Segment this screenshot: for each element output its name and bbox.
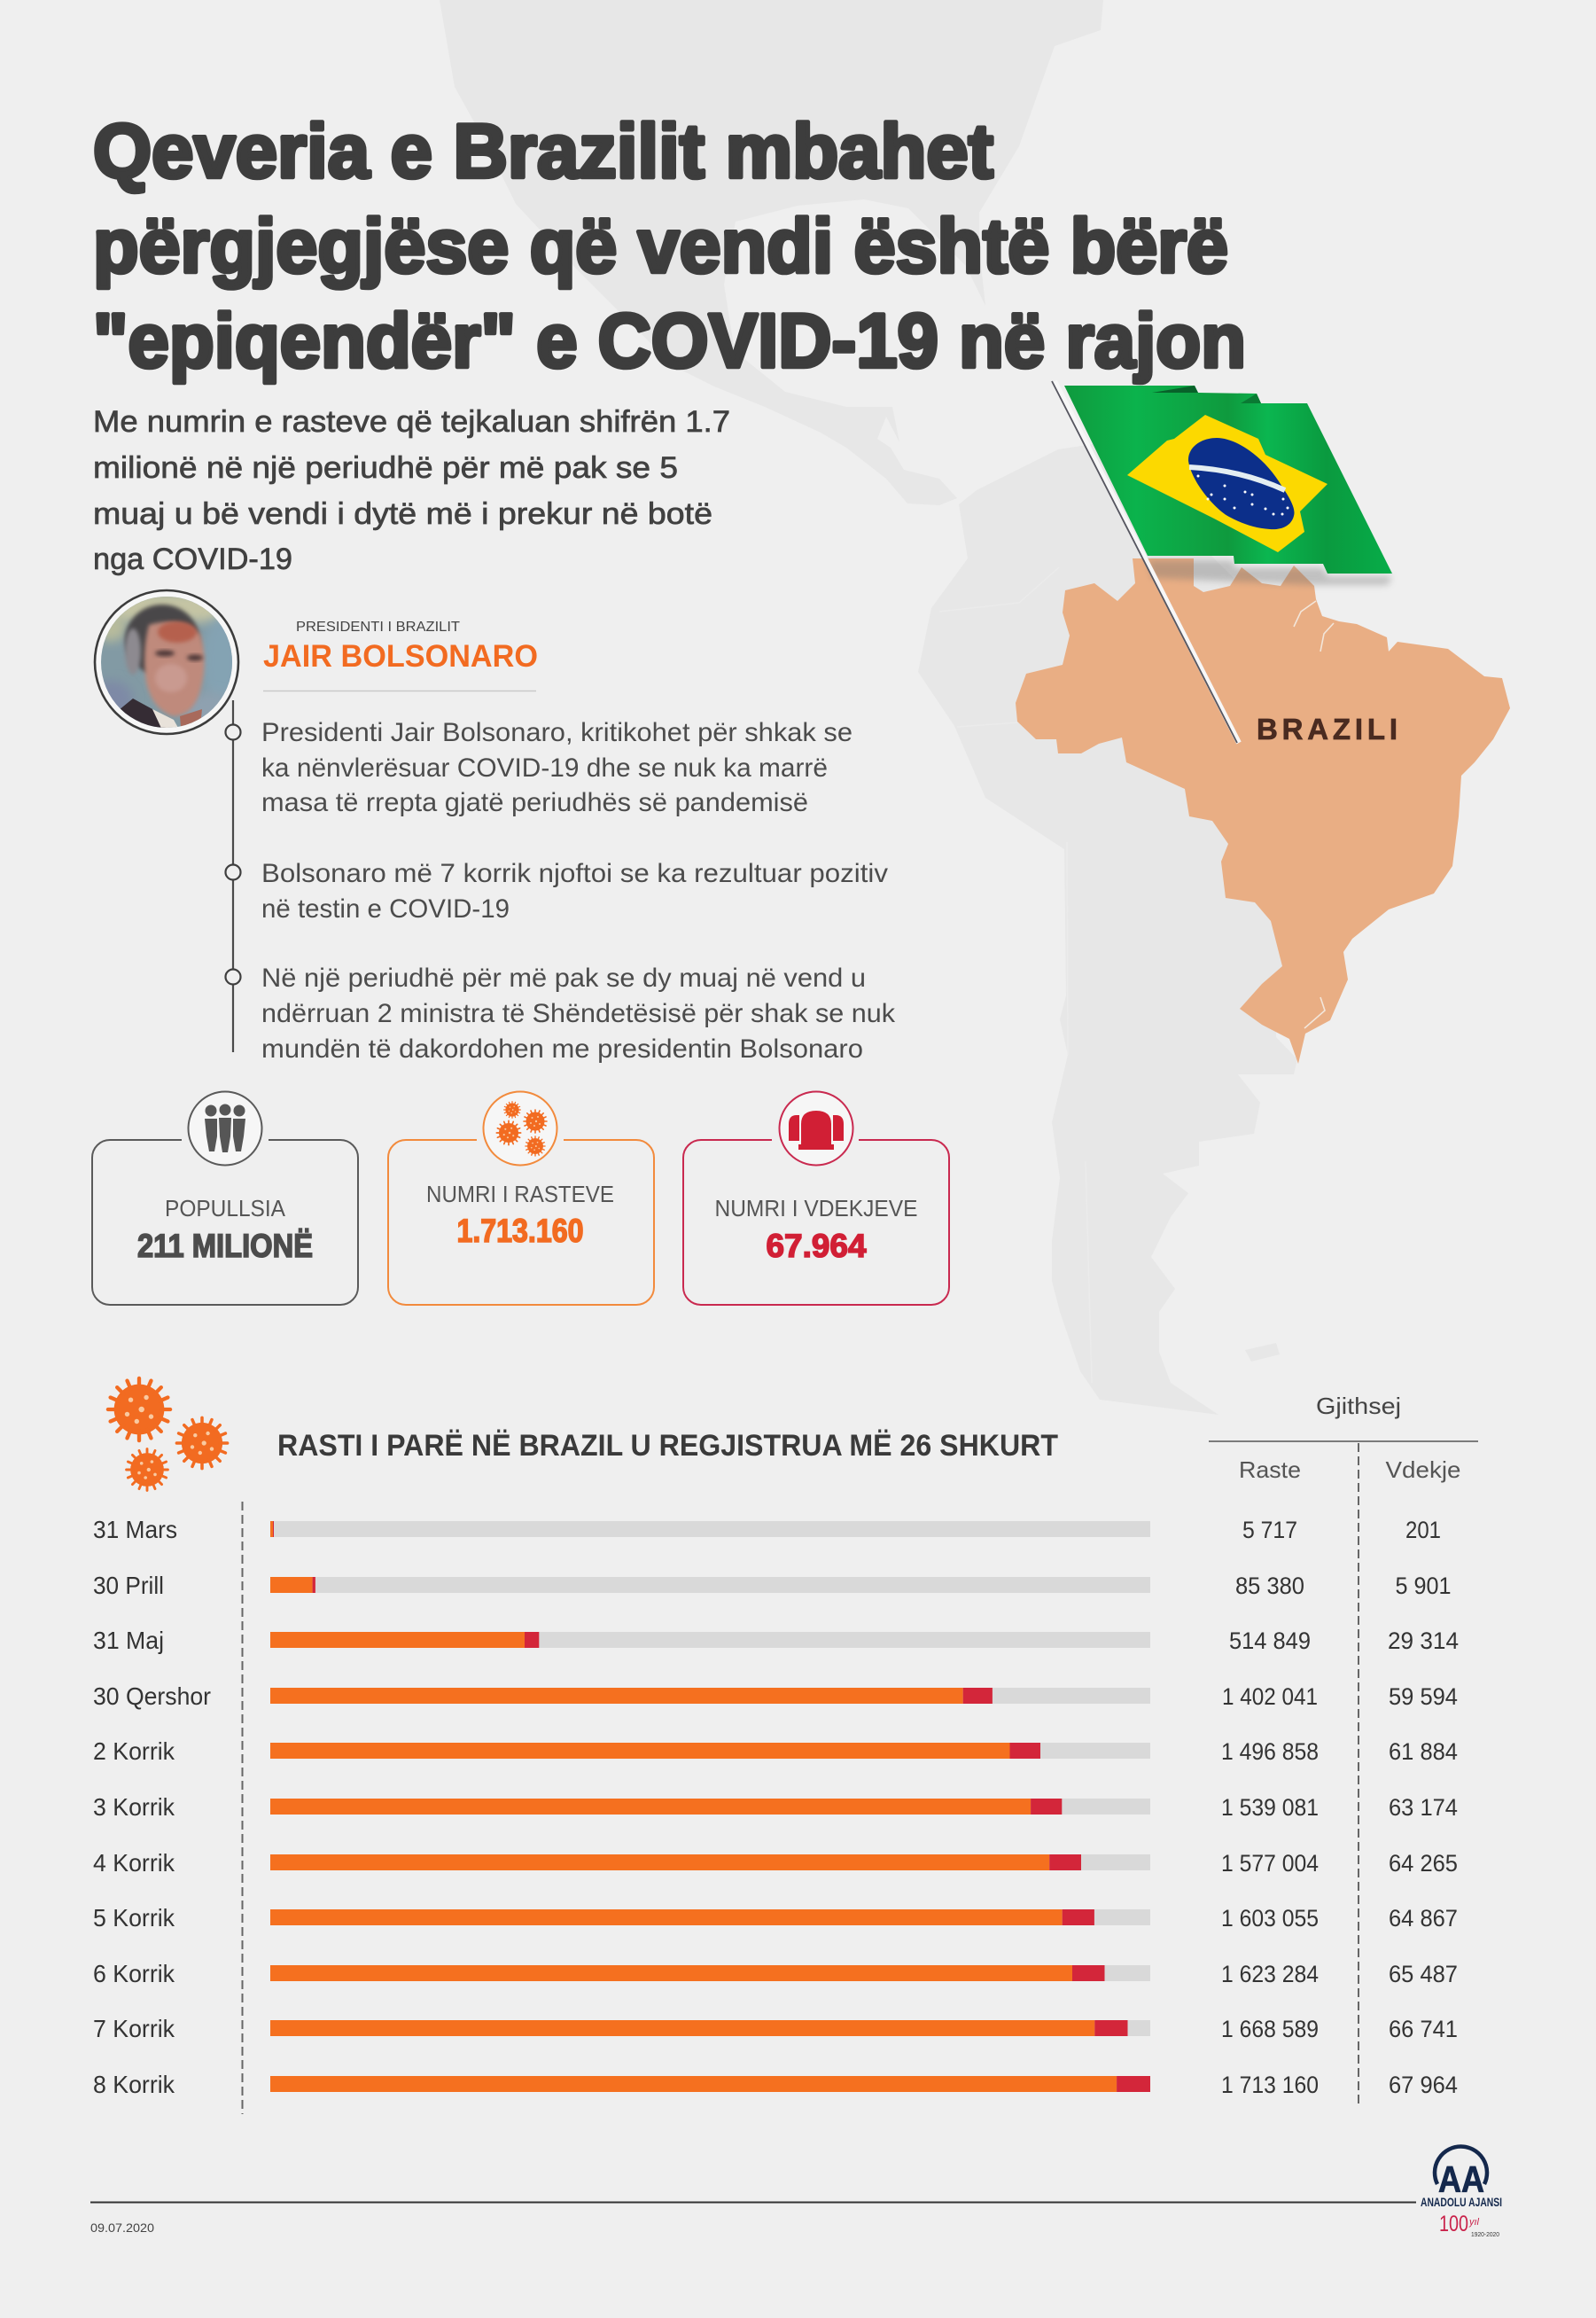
table header — [1209, 1393, 1478, 1483]
title: përgjegjëse që vendi është bërë — [93, 204, 1228, 289]
text block: point 2: në testin e COVID-19 — [261, 894, 510, 924]
row: 30 Qershor: 59 594 — [1389, 1683, 1458, 1710]
subtitle text block: Me numrin e rasteve që tejkaluan shifrën 1.7 — [93, 405, 730, 439]
subtitle text block: nga COVID-19 — [93, 542, 292, 576]
row: 3 Korrik: 3 Korrik — [93, 1793, 175, 1821]
icon: people — [188, 1092, 262, 1165]
row: 30 Prill: 5 901 — [1395, 1573, 1452, 1599]
icon: tombstones — [780, 1092, 852, 1165]
row: 7 Korrik — [93, 2015, 1458, 2042]
row: 30 Prill: 85 380 — [1235, 1573, 1304, 1599]
row: 6 Korrik: 6 Korrik — [93, 1960, 175, 1987]
row: 6 Korrik — [93, 1960, 1458, 1987]
row: 31 Mars: 31 Mars — [93, 1516, 177, 1543]
background map: the Americas — [440, 0, 1329, 1415]
text block: point 3: mundën të dakordohen me presidentin Bolsonaro — [261, 1034, 863, 1064]
icon: Brazilian flag on pole — [1052, 381, 1392, 743]
subtitle text block: milionë në një periudhë për më pak se 5 — [93, 451, 678, 485]
row: 2 Korrik: 1 496 858 — [1221, 1738, 1319, 1765]
row: 3 Korrik — [93, 1793, 1458, 1821]
text block: point 1: Presidenti Jair Bolsonaro, kritikohet për shkak se — [261, 718, 852, 747]
row: 31 Maj: 31 Maj — [93, 1627, 164, 1654]
subtitle text block — [93, 405, 730, 576]
row: 5 Korrik: 5 Korrik — [93, 1904, 175, 1932]
title: "epiqendër" e COVID-19 në rajon — [93, 299, 1246, 384]
text block: point 3: ndërruan 2 ministra të Shëndetësisë për shak se nuk — [261, 999, 895, 1028]
footer date: 09.07.2020 — [90, 2220, 154, 2235]
logo: Anadolu Ajansi: AA — [1438, 2158, 1484, 2200]
table header: Gjithsej — [1316, 1393, 1401, 1419]
row: 30 Prill: 30 Prill — [93, 1572, 164, 1599]
row: 7 Korrik: 66 741 — [1389, 2016, 1458, 2042]
row: 4 Korrik — [93, 1849, 1458, 1877]
row: 31 Maj: 29 314 — [1388, 1627, 1459, 1654]
label: name: JAIR BOLSONARO — [263, 639, 538, 674]
logo: Anadolu Ajansi: 1920-2020 — [1471, 2232, 1499, 2238]
row: 31 Maj: 514 849 — [1229, 1627, 1311, 1654]
panel: deaths: NUMRI I VDEKJEVE — [714, 1195, 918, 1221]
row: 2 Korrik — [93, 1737, 1458, 1765]
title — [93, 109, 1246, 384]
row: 30 Qershor: 1 402 041 — [1222, 1683, 1318, 1710]
panel: population: 211 MILIONË — [137, 1228, 313, 1264]
text block: point 1: ka nënvlerësuar COVID-19 dhe se nuk ka marrë — [261, 753, 828, 783]
logo: Anadolu Ajansi — [1421, 2147, 1502, 2238]
map: Brazil — [1016, 558, 1510, 1064]
row: 30 Qershor: 30 Qershor — [93, 1682, 211, 1710]
row: 2 Korrik: 2 Korrik — [93, 1737, 175, 1765]
table header: Raste — [1239, 1456, 1301, 1483]
panel: deaths: 67.964 — [766, 1228, 867, 1264]
subtitle text block: muaj u bë vendi i dytë më i prekur në botë — [93, 497, 712, 531]
panel: cases — [388, 1092, 654, 1305]
row: 3 Korrik: 1 539 081 — [1221, 1794, 1319, 1821]
row: 4 Korrik: 1 577 004 — [1221, 1850, 1319, 1877]
row: 5 Korrik: 1 603 055 — [1221, 1905, 1319, 1932]
row: 8 Korrik: 1 713 160 — [1221, 2072, 1319, 2098]
logo: Anadolu Ajansi: 100 — [1439, 2212, 1468, 2236]
label: role: PRESIDENTI I BRAZILIT — [296, 620, 461, 635]
portrait: Jair Bolsonaro — [89, 590, 241, 736]
panel: deaths — [683, 1092, 949, 1305]
table header: Vdekje — [1386, 1456, 1460, 1483]
panel: population — [92, 1092, 358, 1305]
row: 30 Prill — [93, 1572, 1452, 1599]
text block: point 2: Bolsonaro më 7 korrik njoftoi se ka rezultuar pozitiv — [261, 859, 888, 888]
stacked bar chart with table — [93, 1516, 1459, 2098]
text block: point 1 — [261, 718, 852, 817]
panel: population: POPULLSIA — [165, 1195, 286, 1221]
logo: Anadolu Ajansi: yıl — [1468, 2217, 1480, 2228]
text block: point 3: Në një periudhë për më pak se dy muaj në vend u — [261, 964, 866, 993]
row: 31 Mars: 5 717 — [1242, 1517, 1297, 1543]
row: 7 Korrik: 1 668 589 — [1221, 2016, 1319, 2042]
row: 6 Korrik: 1 623 284 — [1221, 1961, 1319, 1987]
row: 7 Korrik: 7 Korrik — [93, 2015, 175, 2042]
logo: Anadolu Ajansi: ANADOLU AJANSI — [1421, 2196, 1502, 2209]
panel: cases: NUMRI I RASTEVE — [426, 1181, 614, 1207]
row: 31 Maj — [93, 1627, 1459, 1654]
row: 30 Qershor — [93, 1682, 1458, 1710]
row: 5 Korrik: 64 867 — [1389, 1905, 1458, 1932]
timeline — [225, 700, 241, 1052]
icon: viruses — [484, 1092, 557, 1165]
text block: point 3 — [261, 964, 895, 1064]
map label: Brazil: BRAZILI — [1257, 713, 1397, 745]
row: 8 Korrik — [93, 2071, 1458, 2098]
chart heading: RASTI I PARË NË BRAZIL U REGJISTRUA MË 26 SHKURT — [277, 1429, 1058, 1463]
row: 3 Korrik: 63 174 — [1389, 1794, 1458, 1821]
row: 8 Korrik: 8 Korrik — [93, 2071, 175, 2098]
row: 31 Mars — [93, 1516, 1441, 1543]
row: 4 Korrik: 64 265 — [1389, 1850, 1458, 1877]
title: Qeveria e Brazilit mbahet — [93, 109, 993, 194]
icon: viruses beside chart heading — [108, 1378, 228, 1490]
row: 31 Mars: 201 — [1405, 1517, 1441, 1543]
panel: cases: 1.713.160 — [457, 1213, 583, 1249]
row: 8 Korrik: 67 964 — [1389, 2072, 1458, 2098]
row: 5 Korrik — [93, 1904, 1458, 1932]
row: 2 Korrik: 61 884 — [1389, 1738, 1458, 1765]
row: 4 Korrik: 4 Korrik — [93, 1849, 175, 1877]
row: 6 Korrik: 65 487 — [1389, 1961, 1458, 1987]
text block: point 1: masa të rrepta gjatë periudhës së pandemisë — [261, 788, 808, 817]
text block: point 2 — [261, 859, 888, 924]
